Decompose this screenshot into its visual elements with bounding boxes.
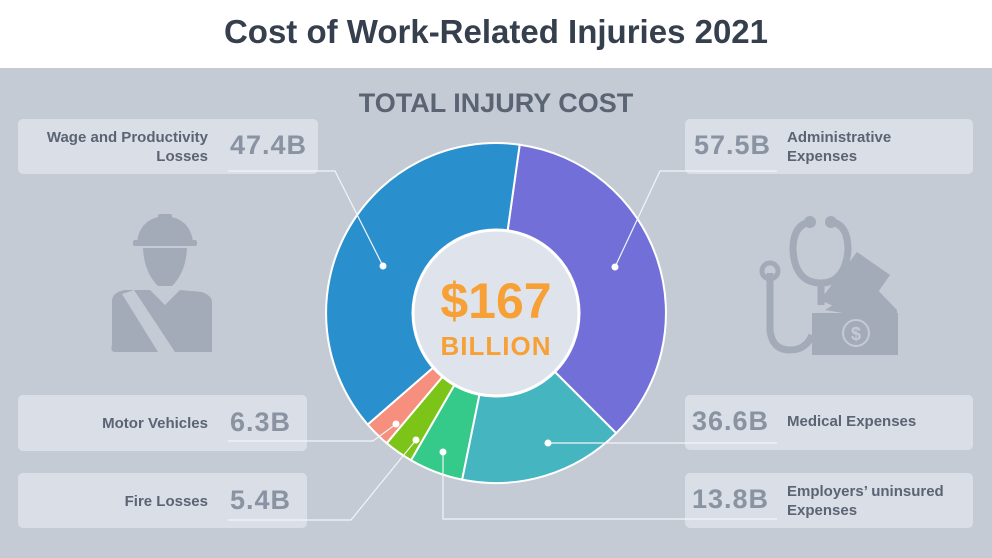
leader lines <box>228 171 777 520</box>
center text: BILLION <box>440 331 552 361</box>
label employers <box>787 483 944 519</box>
label motor: Motor Vehicles <box>102 415 208 432</box>
label employers: Employers’ uninsured <box>787 483 944 500</box>
title: Cost of Work-Related Injuries 2021 <box>224 13 768 50</box>
value motor: 6.3B <box>230 407 291 437</box>
donut <box>326 143 666 483</box>
box: medical <box>685 395 973 450</box>
box: admin <box>685 119 973 174</box>
box: wage <box>18 119 318 174</box>
label wage <box>46 129 208 165</box>
header <box>0 0 992 68</box>
value fire: 5.4B <box>230 485 291 515</box>
label wage: Losses <box>156 148 208 165</box>
box: motor <box>18 395 307 451</box>
label admin <box>787 129 891 165</box>
label employers: Expenses <box>787 502 857 519</box>
label admin: Administrative <box>787 129 891 146</box>
value medical: 36.6B <box>692 406 769 436</box>
center text: $167 <box>440 273 552 329</box>
box: fire <box>18 473 307 528</box>
chart: $ <box>851 324 861 344</box>
label medical: Medical Expenses <box>787 413 916 430</box>
box: employers <box>685 473 973 528</box>
subtitle: TOTAL INJURY COST <box>359 88 633 118</box>
value wage: 47.4B <box>230 130 307 160</box>
label fire: Fire Losses <box>125 493 208 510</box>
center text <box>440 273 552 361</box>
label wage: Wage and Productivity <box>47 129 208 146</box>
value employers: 13.8B <box>692 484 769 514</box>
dots <box>380 262 618 456</box>
icon: stethoscope and money <box>762 222 848 350</box>
label admin: Expenses <box>787 148 857 165</box>
icon: worker <box>111 214 212 352</box>
value admin: 57.5B <box>694 130 771 160</box>
